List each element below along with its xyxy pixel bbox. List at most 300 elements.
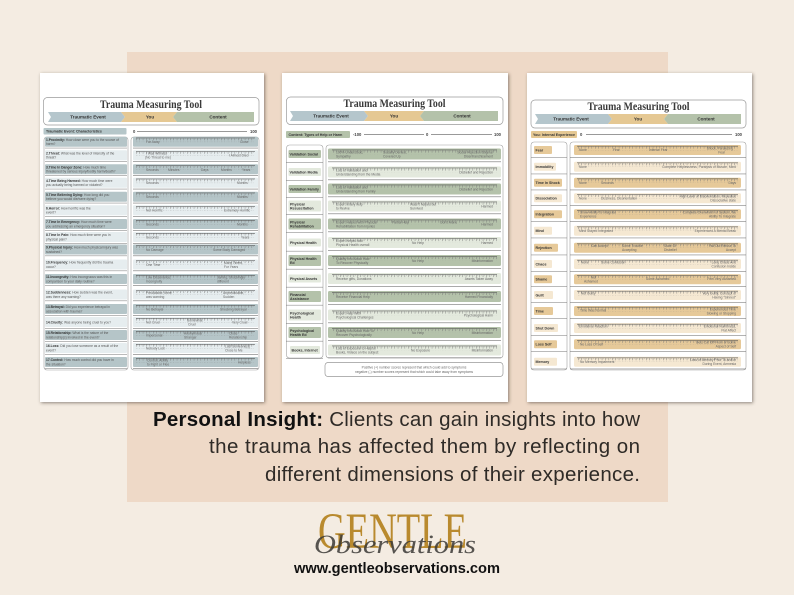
- row validation media: Understanding from the Media: [336, 172, 381, 176]
- row guilt: Very Guilty, Concept of: [703, 291, 736, 295]
- row 17 control: Control, Ability: [147, 358, 168, 362]
- row fear: Fear: [613, 148, 621, 152]
- row 12 suddenness: Predictable, there: [146, 291, 172, 295]
- row validation social: Socially Denied,: [383, 150, 407, 154]
- row validation media: [286, 166, 501, 181]
- row memory: Loss of Memory Prior To and/or: [690, 358, 737, 362]
- row shut down: Flat Affect: [721, 328, 736, 332]
- row 14 cruelty: Not Cruel: [146, 320, 160, 324]
- row physical resuscitation: [286, 200, 501, 215]
- row rejection: Fall Out Refuse To: [709, 244, 736, 248]
- row chaos: Some Confusion: [601, 261, 626, 265]
- row 10 frequency: One Time: [146, 263, 160, 267]
- row validation media: Validation Media: [290, 170, 319, 174]
- row 15 relationship: Anonymous/: [184, 332, 202, 336]
- row physical resuscitation: Survived: [410, 206, 423, 210]
- row physical health education: Quality Info About How: [336, 257, 370, 261]
- panel: traumatic event worksheet: [40, 73, 264, 402]
- scale 0 to 100: 0: [133, 129, 136, 134]
- scale 0 to 100: [133, 129, 258, 134]
- row physical health education: Physical Health: [290, 257, 317, 261]
- row time: Time Was Normal: [580, 309, 606, 313]
- row 9 physical injury: sustained?: [46, 250, 62, 254]
- row dissociation: Dissociative state: [710, 199, 736, 203]
- row 17 control: 17.Control: How much control did you have in: [46, 358, 114, 362]
- row physical rehabilitation: Harmed: [481, 222, 493, 226]
- row 16 loss: Close to Me: [225, 348, 243, 352]
- row memory: No Memory Impairment: [580, 360, 615, 364]
- row 1 proximity: Far Away: [146, 140, 160, 144]
- row 15 relationship: Impersonal: [146, 334, 163, 338]
- left column frame: [531, 142, 567, 370]
- row fear: [531, 145, 746, 158]
- scale -100 to 100: [353, 132, 502, 137]
- row rejection: Accept: [726, 248, 736, 252]
- row 9 physical injury: No Damage: [146, 248, 164, 252]
- section tag: types of help or harm: Content: Types of Help or Harm: [288, 133, 342, 137]
- row validation social: [286, 148, 501, 163]
- row 7 time in emergency: Months: [237, 222, 248, 226]
- row physical resuscitation: to Revive: [336, 206, 350, 210]
- row physical health: Expert helped with: [336, 239, 363, 243]
- row dissociation: [531, 193, 746, 206]
- row 15 relationship: Stranger: [184, 336, 198, 340]
- row 11 incongruity: different: [217, 280, 229, 284]
- row integration: Show Ability To Integrate: [580, 211, 616, 215]
- row shut down: [531, 323, 746, 336]
- row 2 threat: [45, 150, 258, 162]
- row mind: Mind: [536, 229, 544, 233]
- row 16 loss: Lost Someone(s): [225, 344, 250, 348]
- row 6 horror: [45, 205, 258, 217]
- row shame: Shame: [536, 278, 547, 282]
- row physical resuscitation: Expert Initery help: [336, 202, 363, 206]
- row physical resuscitation: Wasn't helped but: [410, 202, 436, 206]
- row rejection: Can Accept: [591, 244, 608, 248]
- row 13 betrayal: association with trauma?: [46, 309, 82, 313]
- panel: internal experience worksheet: [527, 73, 752, 402]
- row time: Experiences Time: [710, 307, 736, 311]
- row 16 loss: [45, 343, 258, 355]
- header frame: internal experience sheet: Traumatic Event: [553, 116, 589, 122]
- row 1 proximity: harm?: [46, 142, 56, 146]
- row rejection: Rejection: [536, 246, 552, 250]
- header frame: traumatic event sheet: Content: [209, 114, 227, 120]
- row physical rehabilitation: [286, 218, 501, 233]
- website url: www.gentleobservations.com: [293, 561, 500, 577]
- row 10 frequency: [45, 260, 258, 271]
- row 8 time in pain: [45, 232, 258, 244]
- row dissociation: Dizziness, Disorientation: [601, 197, 637, 201]
- row books, internet: Books, Videos on the subject: [336, 350, 379, 354]
- row physical resuscitation: Harmed: [481, 204, 493, 208]
- row 16 loss: 16.Loss: Did you lose someone as a result of the: [46, 344, 118, 348]
- row financial assistance: Assistance: [290, 297, 309, 301]
- row 5 time believing dying: [45, 192, 258, 203]
- row 3 time in danger zone: Years: [242, 168, 251, 172]
- row physical health education: Misinformation: [472, 259, 493, 263]
- row books, internet: Misinformation: [472, 348, 493, 352]
- row 4 time being harmed: you actually being harmed or violated?: [46, 183, 103, 187]
- footnote box: Positive (+) number scores represent that which could add to symptoms: [362, 366, 467, 370]
- row physical assets: Assets Taken Away: [465, 277, 493, 281]
- row 4 time being harmed: 4.Time Being Harmed: How much time were: [46, 179, 113, 183]
- row 6 horror: Extremely Horrific: [224, 209, 250, 213]
- row guilt: [531, 290, 746, 302]
- row 4 time being harmed: Months: [237, 181, 248, 185]
- row psychological health education: No Help: [412, 331, 424, 335]
- row books, internet: Books, Internet: [292, 348, 318, 352]
- row time in shock: Days: [728, 181, 736, 185]
- row 12 suddenness: Sudden: [223, 295, 235, 299]
- row psychological health: Psychological Harm: [464, 314, 493, 318]
- row shut down: Emotional Reaction: [579, 325, 608, 329]
- row 12 suddenness: 12.Suddenness: How sudden was the event,: [46, 291, 113, 295]
- row 10 frequency: 10.Frequency: How frequently did the trauma: [46, 261, 113, 265]
- row 3 time in danger zone: Months: [221, 168, 232, 172]
- row validation family: Understanding from Family: [336, 189, 376, 193]
- row 12 suddenness: was there any warning?: [46, 295, 81, 299]
- row 16 loss: Nobody Lost: [146, 346, 165, 350]
- row books, internet: No Exposure: [411, 348, 430, 352]
- row 12 suddenness: was warning: [146, 295, 164, 299]
- row 8 time in pain: physical pain?: [46, 237, 67, 241]
- row 7 time in emergency: [45, 219, 258, 231]
- row shame: [531, 274, 746, 287]
- row rejection: Some Trouble: [622, 244, 643, 248]
- row immobility: Complete Helplessness, Paralysis of Muscle, Mind: [662, 165, 736, 169]
- row 5 time believing dying: Months: [237, 195, 248, 199]
- row 3 time in danger zone: threatened by serious injury/bodily harm/death?: [46, 170, 116, 174]
- row 6 horror: event?: [46, 211, 56, 215]
- row 13 betrayal: 13.Betrayal: Did you experience betrayal in: [46, 305, 110, 309]
- row physical assets: Physical Assets: [290, 277, 317, 281]
- row psychological health: Psychological Challenges: [336, 315, 374, 319]
- row rejection: [531, 243, 746, 255]
- row psychological health education: Health Ed: [290, 333, 307, 337]
- row validation social: 100% Understood,: [336, 150, 363, 154]
- scale -100 to 100: 100: [494, 132, 502, 137]
- text block: personal insight: the trauma has affected them by reflecting on: [209, 435, 640, 458]
- row time in shock: [531, 178, 746, 190]
- row 4 time being harmed: Seconds: [146, 181, 159, 185]
- row memory: During Event, Amnesia: [702, 362, 736, 366]
- row psychological health education: Recover Psychologically: [336, 333, 372, 337]
- row physical health: [286, 237, 501, 251]
- right column frame: [570, 142, 746, 370]
- header frame: traumatic event sheet: [44, 98, 259, 125]
- row psychological health: [286, 310, 501, 324]
- row memory: Memory: [536, 360, 549, 364]
- row loss self: [531, 339, 746, 352]
- row 13 betrayal: [45, 304, 258, 316]
- row 11 incongruity: 11.Incongruity: How incongruous was this in: [46, 275, 112, 279]
- row 15 relationship: [45, 330, 258, 342]
- header frame: content sheet: Trauma Measuring Tool: [344, 98, 446, 110]
- row integration: Ability To Integrate: [709, 215, 736, 219]
- row fear: Intense Fear: [649, 148, 668, 152]
- row 1 proximity: Close: [240, 140, 249, 144]
- row financial assistance: Harmed Financially: [465, 295, 493, 299]
- row 3 time in danger zone: Days: [201, 168, 209, 172]
- header frame: content sheet: Traumatic Event: [313, 114, 349, 118]
- header frame: internal experience sheet: Content: [697, 116, 715, 122]
- row shame: Ashamed: [584, 280, 598, 284]
- row psychological health education: Misinformation: [472, 331, 493, 335]
- row 11 incongruity: Jarring, Shockingly: [217, 276, 245, 280]
- row physical health education: [286, 255, 501, 269]
- row psychological health: Health: [290, 316, 301, 320]
- footnote box: negative (-) number scores represent that which could take away from symptoms: [355, 370, 473, 374]
- row loss self: Loss Self: [536, 343, 552, 347]
- row 9 physical injury: 9.Physical Injury: How much physical injury was: [46, 246, 118, 250]
- row financial assistance: Financial: [290, 293, 306, 297]
- header frame: content sheet: Content: [453, 114, 471, 118]
- row integration: Complete Overwhelm of System, No: [683, 211, 736, 215]
- header frame: internal experience sheet: [531, 100, 746, 128]
- row physical rehabilitation: Partial Help: [392, 221, 409, 225]
- section tag: types of help or harm: [286, 131, 350, 138]
- row 16 loss: event?: [46, 348, 56, 352]
- row loss self: Aspect of Self: [716, 345, 736, 349]
- row 15 relationship: Close: [229, 332, 238, 336]
- row chaos: None: [581, 261, 589, 265]
- left column frame: [44, 137, 128, 370]
- row validation media: Disbelief and Rejection: [459, 170, 493, 174]
- row 17 control: to Fight or Flee: [147, 362, 169, 366]
- row validation family: Disbelief and Rejection: [459, 188, 493, 192]
- row 2 threat: threat?: [46, 156, 56, 160]
- row mind: Experienced A Mental Break: [695, 229, 736, 233]
- logo: gentle observations: Observations: [314, 530, 476, 559]
- row 11 incongruity: Low Dissonance,: [146, 276, 171, 280]
- row financial assistance: [286, 291, 501, 305]
- right column frame: [326, 145, 503, 358]
- logo: gentle observations: GENTLE: [318, 504, 467, 560]
- row 7 time in emergency: Seconds: [146, 222, 159, 226]
- row 6 horror: Not Horrific: [146, 209, 163, 213]
- section tag: characteristics: [44, 128, 126, 134]
- row 15 relationship: Relationship: [229, 336, 247, 340]
- row 14 cruelty: [45, 317, 258, 329]
- row validation social: Social Rejection/Stigma/: [457, 150, 493, 154]
- row validation family: Lots of Validation and: [336, 185, 368, 189]
- row time in shock: None: [579, 181, 587, 185]
- row psychological health education: Psychological: [290, 329, 314, 333]
- row physical health: No Help: [412, 241, 424, 245]
- row 11 incongruity: Incongruity: [146, 280, 162, 284]
- row physical health education: To Recover Physically: [336, 261, 369, 265]
- row guilt: Guilt: [536, 293, 544, 297]
- row physical health: Physical Health: [290, 241, 317, 245]
- row 17 control: the situation?: [46, 362, 66, 366]
- header frame: content sheet: [286, 97, 503, 124]
- row rejection: Accepting: [622, 248, 637, 252]
- row 17 control: [45, 357, 258, 369]
- row psychological health education: Quality Info About How To: [336, 329, 374, 333]
- row shame: Feel Very Ashamed: [707, 277, 736, 281]
- row time in shock: Seconds: [601, 181, 614, 185]
- header frame: traumatic event sheet: You: [146, 114, 154, 120]
- beige background panel: [127, 52, 668, 502]
- row 12 suddenness: Unpredictable,: [223, 291, 244, 295]
- row fear: Fear: [718, 150, 726, 154]
- row dissociation: None: [579, 197, 587, 201]
- row 15 relationship: relationship(s) involved in the event?: [46, 335, 100, 339]
- row physical assets: Receive gifts, Donations: [336, 277, 372, 281]
- row 2 threat: I Was Witness: [146, 152, 167, 156]
- row physical health: Physical Health overall: [336, 243, 370, 247]
- row 14 cruelty: Somewhat: [187, 318, 203, 322]
- row 3 time in danger zone: Seconds: [146, 168, 159, 172]
- row 13 betrayal: No Betrayal: [146, 308, 163, 312]
- row 3 time in danger zone: [45, 164, 258, 176]
- row financial assistance: Receive Financial Help: [336, 295, 370, 299]
- row fear: Fear: [536, 148, 544, 152]
- row validation media: Lots of Validation and: [336, 168, 368, 172]
- row 14 cruelty: 14.Cruelty: Was anyone being cruel to you?: [46, 320, 111, 324]
- row 2 threat: 2.Threat: What was the level of intensity of the: [46, 151, 115, 155]
- row books, internet: [286, 344, 501, 359]
- text block: personal insight: [153, 408, 640, 486]
- section tag: characteristics: Traumatic Event: Characteristics: [46, 130, 102, 134]
- row shut down: Shut Down: [536, 326, 554, 330]
- row memory: [531, 357, 746, 369]
- scale -100 to 100: -100: [353, 132, 362, 137]
- footnote box: [325, 362, 503, 376]
- row 14 cruelty: Very Cruel: [232, 320, 248, 324]
- row integration: Integration: [536, 213, 554, 217]
- row physical health education: Ed: [290, 261, 295, 265]
- row time: [531, 306, 746, 318]
- scale 0 to 100: 100: [250, 129, 258, 134]
- row physical health education: No Help: [412, 259, 424, 263]
- row physical assets: [286, 273, 501, 287]
- scale 0 to 100: 0: [580, 132, 583, 137]
- row psychological health education: [286, 327, 501, 341]
- row mind: [531, 226, 746, 238]
- row integration: Experience: [580, 215, 597, 219]
- row guilt: Having "Sinned": [712, 295, 737, 299]
- row validation social: Validation Social: [290, 152, 318, 156]
- row 1 proximity: [45, 137, 258, 148]
- row 2 threat: (No Threat to me): [145, 156, 171, 160]
- text block: personal insight: different dimensions of their experience.: [265, 463, 640, 486]
- row validation social: Sympathy: [336, 154, 351, 158]
- row psychological health: Psychological: [290, 311, 314, 315]
- row rejection: Disbelief: [664, 248, 677, 252]
- row 2 threat: I Almost Died: [229, 154, 249, 158]
- row 1 proximity: 1.Proximity: How close were you to the source of: [46, 138, 119, 142]
- row physical resuscitation: Physical: [290, 202, 305, 206]
- row validation social: Disenfranchisement: [464, 154, 493, 158]
- row shame: Some Ashamed: [646, 277, 669, 281]
- row psychological health: Expert Help With: [336, 311, 361, 315]
- row 7 time in emergency: you addressing an emergency situation?: [46, 224, 105, 228]
- row physical resuscitation: Resuscitation: [290, 207, 314, 211]
- row 9 physical injury: [45, 244, 258, 256]
- scale -100 to 100: 0: [426, 132, 429, 137]
- row validation family: Validation Family: [290, 187, 319, 191]
- row 6 horror: 6.Horror: How horrific was the: [46, 206, 91, 210]
- row immobility: Immobility: [536, 165, 553, 169]
- row dissociation: High Level of Disorientation, Repeated: [680, 195, 736, 199]
- text block: personal insight: Personal Insight: Clients can gain insights into how: [153, 408, 640, 431]
- header frame: internal experience sheet: You: [634, 116, 642, 122]
- row chaos: Long Chaos And: [712, 260, 736, 264]
- row physical rehabilitation: Rehabilitation from Injuries: [336, 224, 375, 228]
- row 9 physical injury: Some Body Damaged: [213, 248, 245, 252]
- row validation family: [286, 184, 501, 198]
- row 11 incongruity: comparison to your daily routine?: [46, 279, 95, 283]
- row 7 time in emergency: 7.Time In Emergency: How much time were: [46, 220, 112, 224]
- row integration: [531, 209, 746, 222]
- row 13 betrayal: Shocking Betrayal: [220, 308, 247, 312]
- row immobility: None: [579, 165, 587, 169]
- row 17 control: Helpless: [238, 360, 251, 364]
- row 14 cruelty: Cruel: [188, 322, 196, 326]
- row loss self: No Loss Of Self: [580, 342, 603, 346]
- row 15 relationship: 15.Relationship: What is the nature of the: [46, 331, 108, 335]
- row 10 frequency: For Years: [224, 265, 238, 269]
- row 3 time in danger zone: Minutes: [168, 168, 180, 172]
- left column frame: [286, 145, 323, 358]
- row physical rehabilitation: Got It Alone: [440, 221, 457, 225]
- row physical rehabilitation: Physical: [290, 220, 305, 224]
- row fear: None: [579, 148, 587, 152]
- row chaos: Confusion Inside: [711, 264, 736, 268]
- row time in shock: Time In Shock: [536, 181, 560, 185]
- row chaos: [531, 259, 746, 272]
- header frame: traumatic event sheet: Trauma Measuring Tool: [100, 99, 202, 111]
- row mind: Mind Stayed Integrated: [579, 229, 613, 233]
- row books, internet: Lots of Exposure to Helpful: [336, 346, 376, 350]
- row time: Time: [536, 309, 544, 313]
- row 5 time believing dying: believe you would die/were dying?: [46, 197, 96, 201]
- row chaos: Chaos: [536, 262, 546, 266]
- row validation social: Covered Up: [383, 154, 401, 158]
- row 10 frequency: occur?: [46, 265, 56, 269]
- row rejection: State Of: [664, 244, 676, 248]
- row 10 frequency: Many Times,: [224, 261, 243, 265]
- row 3 time in danger zone: 3.Time In Danger Zone: How much time: [46, 166, 106, 170]
- row guilt: Not Guilty: [581, 291, 596, 295]
- row 5 time believing dying: Seconds: [146, 195, 159, 199]
- row 12 suddenness: [45, 290, 258, 301]
- row physical rehabilitation: Expert Helped with Physical: [336, 220, 377, 224]
- row shut down: Emotional Numbness,: [704, 324, 736, 328]
- row physical rehabilitation: Rehabilitation: [290, 225, 314, 229]
- section tag: internal experience: [531, 131, 577, 138]
- row 4 time being harmed: [45, 178, 258, 189]
- panel: content worksheet: [282, 73, 508, 402]
- row fear: Shock, Paralyzing: [707, 146, 733, 150]
- section tag: internal experience: You: Internal Experience: [533, 133, 575, 137]
- header frame: content sheet: You: [390, 114, 398, 118]
- row 11 incongruity: [45, 274, 258, 286]
- row time: Slowing or Stopping: [707, 311, 736, 315]
- row 8 time in pain: 8.Time In Pain: How much time were you in: [46, 233, 111, 237]
- scale 0 to 100: 100: [735, 132, 743, 137]
- header frame: internal experience sheet: Trauma Measuring Tool: [588, 101, 690, 113]
- row shame: Not: [591, 276, 596, 280]
- row 8 time in pain: Seconds: [146, 236, 159, 240]
- right column frame: [131, 137, 259, 370]
- scale 0 to 100: [580, 132, 743, 137]
- row dissociation: Dissociation: [536, 197, 557, 201]
- row 5 time believing dying: 5.Time Believing Dying: How long did you: [46, 193, 110, 197]
- row physical health: Harmed: [481, 241, 493, 245]
